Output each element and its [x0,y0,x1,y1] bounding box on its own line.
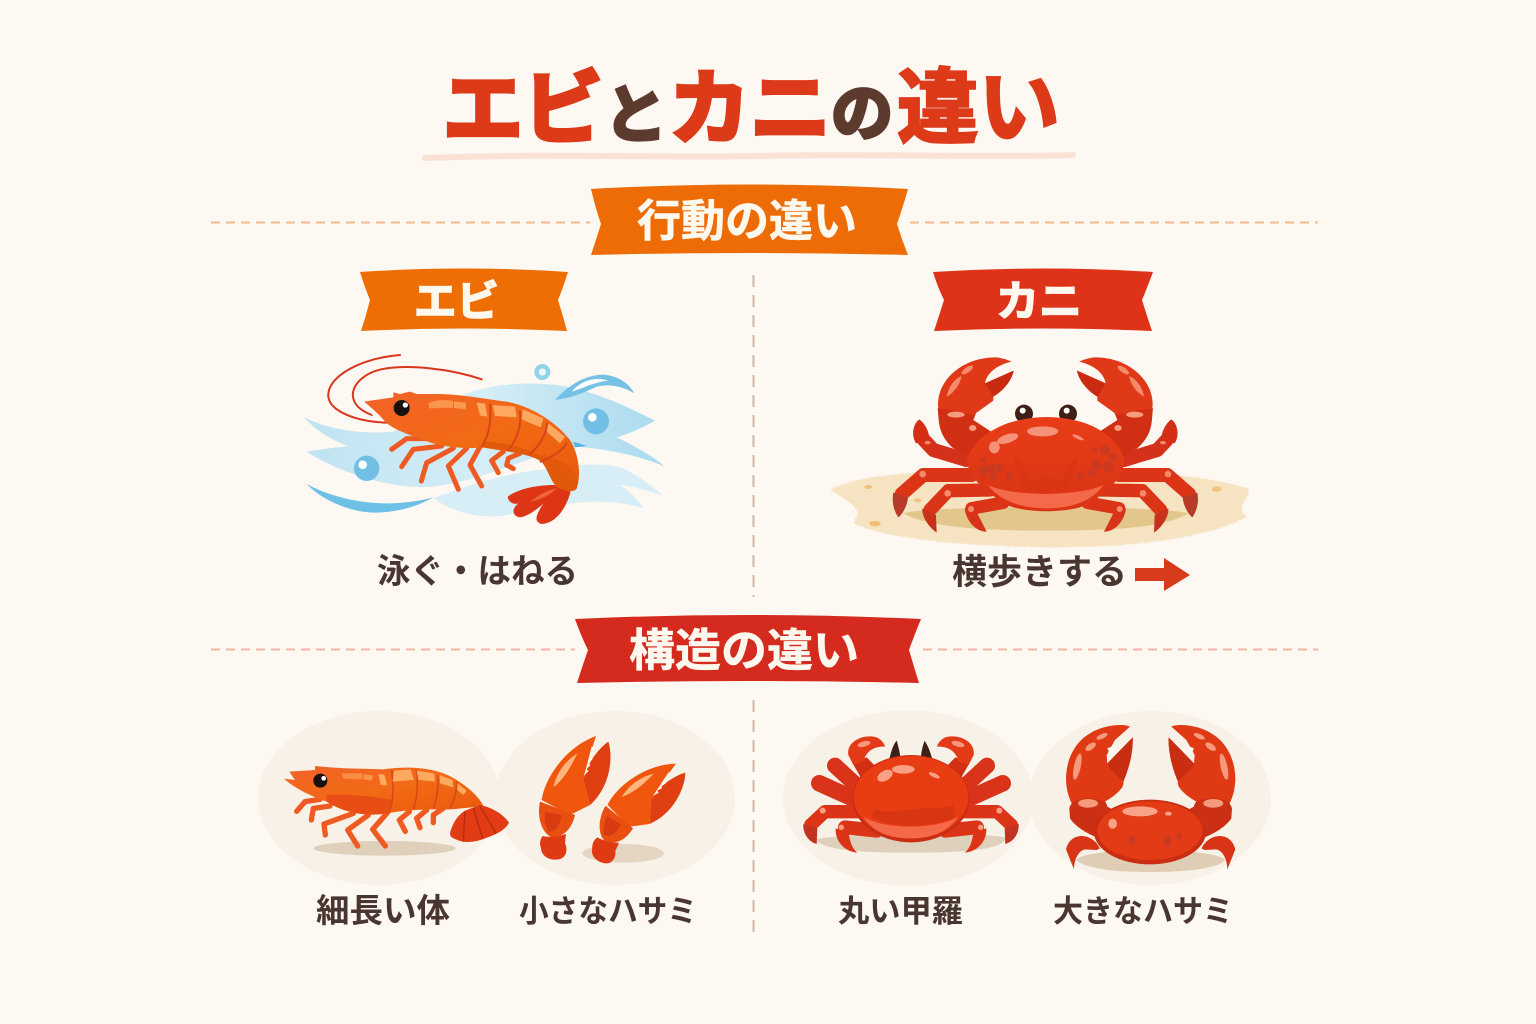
shadow [583,844,664,863]
caption: big pincers: 大きなハサミ [1053,894,1233,929]
illustration: big-claw crab [1066,725,1235,872]
section banner: behaviour: 行動の違い [637,197,857,246]
backdrop circles [258,710,1271,886]
tail [450,805,509,842]
bubbles [354,364,609,481]
body [364,392,579,491]
title: と [604,81,667,151]
title: の [831,80,893,149]
title [425,63,1073,158]
ribbon: shrimp: エビ [414,278,499,325]
tail fan [508,485,571,524]
eye [394,400,410,416]
illustration: small pincers [539,736,689,879]
ribbon: crab [933,268,1153,331]
pincer right [587,746,689,879]
caption: small pincers: 小さなハサミ [519,894,697,929]
caption: slender body: 細長い体 [316,892,450,929]
illustration: long shrimp body [284,766,509,856]
eye [313,774,327,788]
ribbon: crab: カニ [996,278,1082,325]
legs [392,439,520,489]
shell [967,417,1124,511]
caption: walk sideways: 横歩きする [952,553,1127,592]
shadow [314,841,456,856]
ribbon: shrimp [360,268,568,331]
claw [938,403,993,455]
section banner: behaviour [591,184,908,255]
left limbs [893,357,1014,533]
highlights [428,400,565,443]
shell [1094,800,1206,864]
water waves [303,375,665,516]
eyes [1015,405,1077,423]
arrow [1135,558,1190,591]
pincer left [539,736,611,860]
illustration: swimming shrimp [303,355,665,524]
shell [852,755,970,842]
limbs [1066,725,1133,869]
section banner: structure [575,615,921,683]
antennae [328,355,482,423]
legs [297,799,443,846]
sand [830,470,1249,547]
caption: swim and jump: 泳ぐ・はねる [377,553,578,591]
shadow [1076,850,1225,872]
limbs [803,736,885,853]
shadow [815,834,1007,853]
illustration: round-shell crab [803,736,1019,853]
body [284,766,483,815]
section banner: structure: 構造の違い [629,625,859,676]
caption: round shell: 丸い甲羅 [838,894,963,929]
title: 違い [897,63,1060,154]
horns [889,741,933,762]
title: カニ [669,65,831,155]
illustration: crab on sand [830,357,1249,547]
title: エビ [443,65,603,154]
